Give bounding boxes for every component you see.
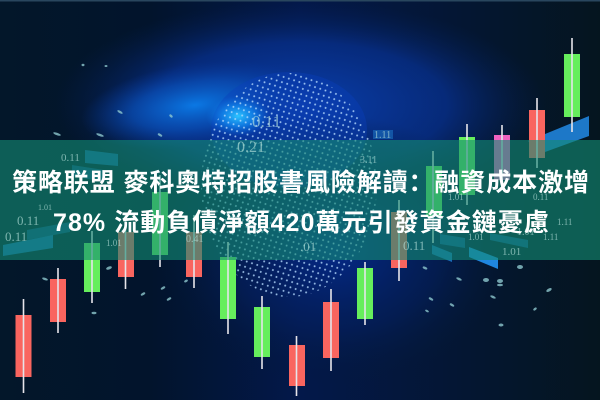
faint chart numbers: 1.01 [106,238,122,248]
title [12,163,589,237]
faint chart numbers: 0.11 [252,112,281,131]
faint chart numbers: 1.01 [502,246,521,258]
faint chart numbers: 1.01 [517,227,534,238]
faint chart numbers: 0.11 [5,229,27,244]
faint chart numbers: 1.01 [448,192,464,202]
faint chart numbers: 0.41 [186,234,204,245]
faint chart numbers: 0.11 [403,238,425,253]
faint chart numbers: .01 [300,239,316,254]
globe of dots [201,73,376,297]
scattered particles [42,64,552,327]
title: 策略联盟 麥科奧特招股書風險解讀：融資成本激增 [12,163,589,199]
faint chart numbers: 1.01 [38,203,52,212]
faint chart numbers: 0.21 [237,139,265,156]
faint chart numbers: 1.11 [543,232,558,242]
faint chart numbers: 0.11 [17,213,39,228]
faint chart numbers: 1.11 [374,130,391,141]
title: 78% 流動負債淨額420萬元引發資金鏈憂慮 [53,209,549,237]
blue ribbon bars [3,116,589,269]
faint chart numbers [5,112,572,258]
faint chart numbers: 1.01 [468,232,484,242]
faint chart numbers: 1.11 [557,217,572,227]
faint chart numbers: 0.11 [533,192,548,202]
teal title band [0,140,600,260]
faint chart numbers: 3.11 [360,155,377,166]
faint chart numbers: 0.11 [61,152,80,164]
